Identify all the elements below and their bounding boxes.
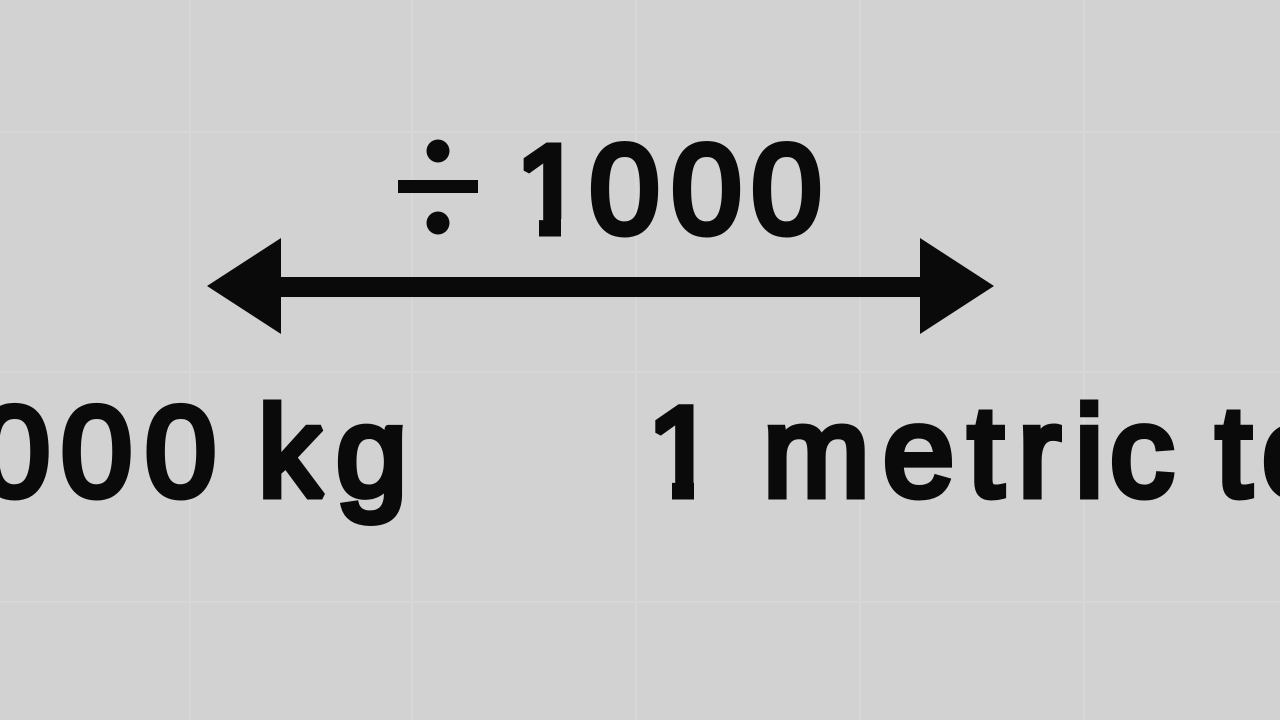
label: divide by 1000: 1000	[515, 119, 822, 260]
arrow: double-headed	[207, 238, 994, 334]
